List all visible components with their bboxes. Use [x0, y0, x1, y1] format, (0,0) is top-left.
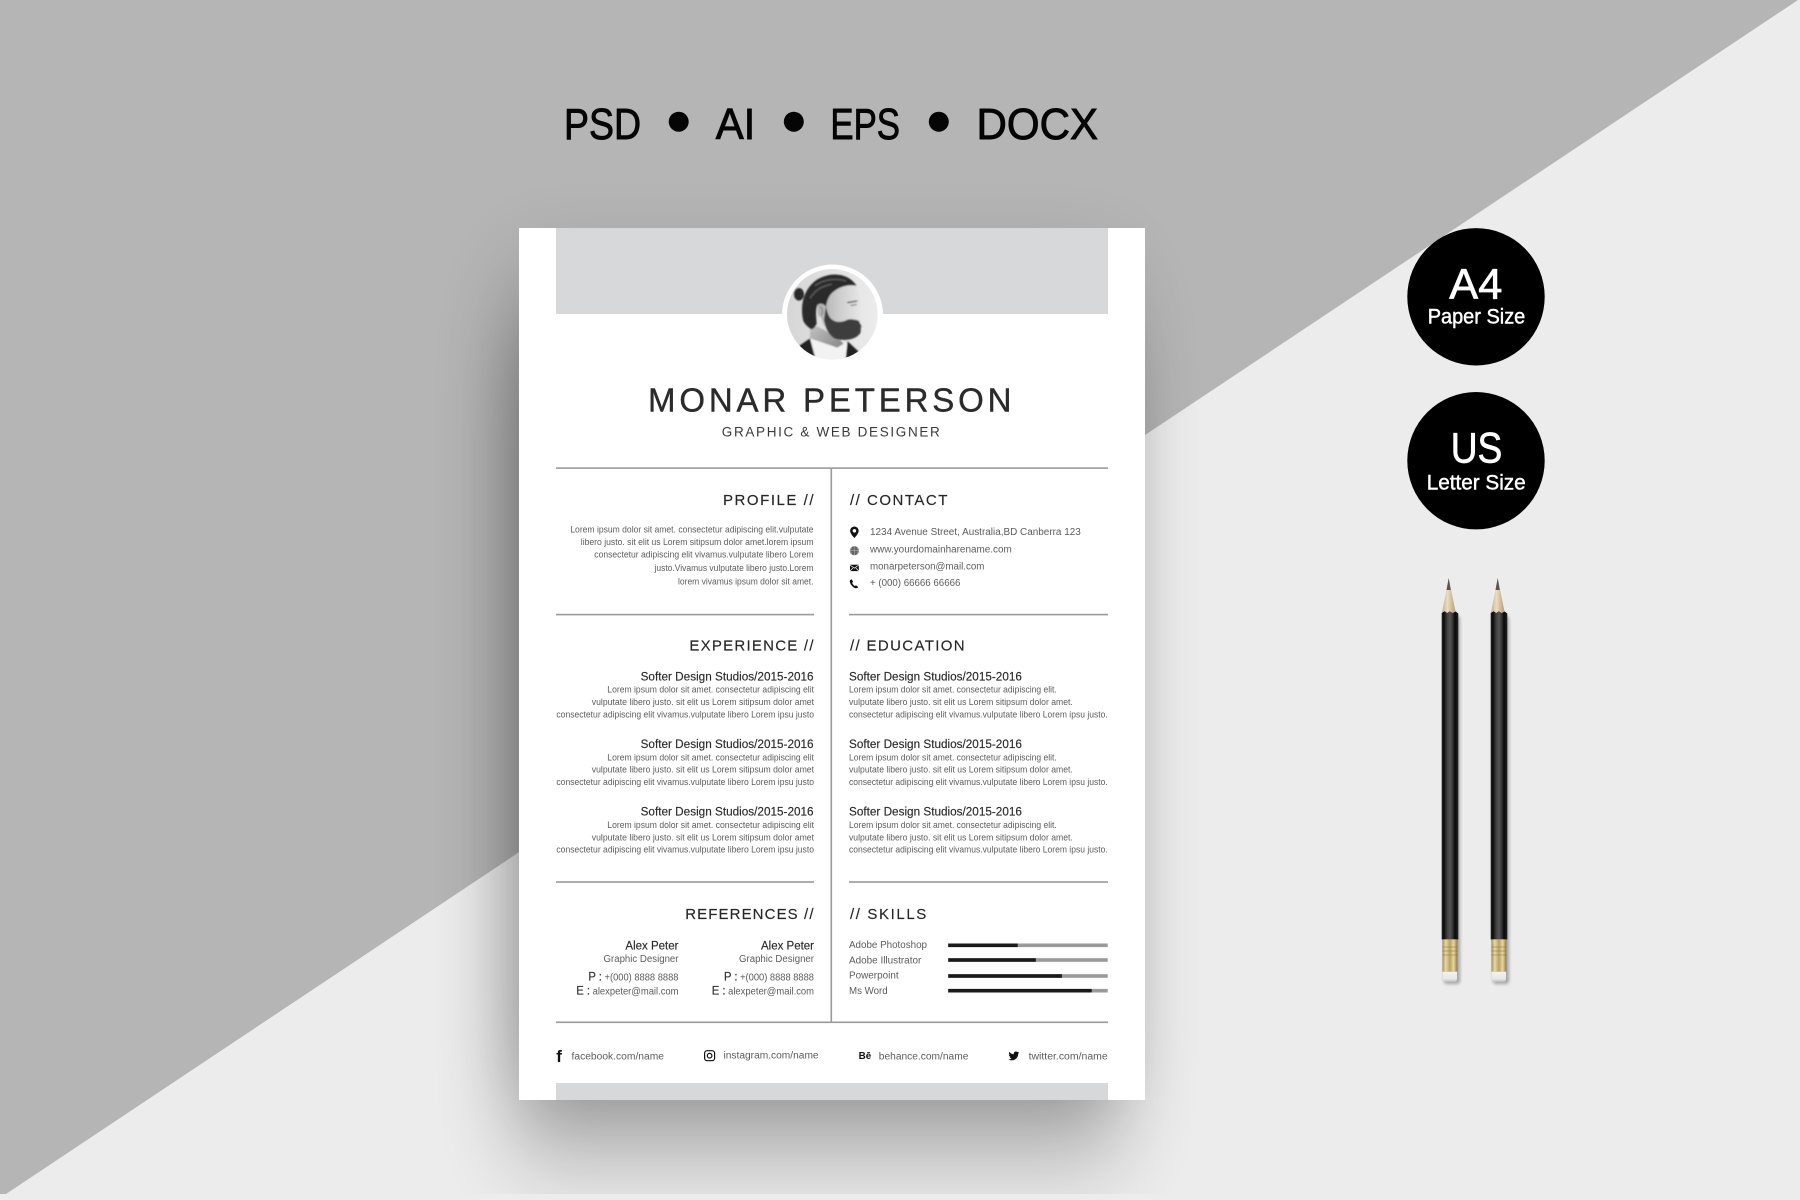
icon: globe: [850, 546, 859, 555]
education heading: // EDUCATION: [850, 638, 965, 655]
page drop shadow: [514, 310, 1120, 1126]
section divider rules: [556, 467, 1108, 1023]
icon: instagram: [705, 1051, 715, 1061]
profile heading: PROFILE //: [723, 492, 814, 509]
profile body text: libero justo. sit elit us Lorem sitipsum dolor amet.lorem ipsum: [581, 537, 814, 548]
facebook link: facebook.com/name: [572, 1051, 664, 1062]
profile body text: consectetur adipiscing elit vivamus.vulputate libero Lorem: [594, 550, 814, 561]
experience entry 1: consectetur adipiscing elit vivamus.vulputate libero Lorem ipsu justo: [556, 709, 814, 720]
experience entry 3: Lorem ipsum dolor sit amet. consectetur adipiscing elit: [607, 820, 814, 831]
experience entry 2: consectetur adipiscing elit vivamus.vulputate libero Lorem ipsu justo: [556, 777, 814, 788]
education entry 3: [849, 807, 1108, 856]
icon: location pin: [850, 526, 859, 538]
icon: pencil 1: [1442, 578, 1460, 984]
references heading: REFERENCES //: [685, 906, 814, 923]
panel: profile: [570, 492, 814, 587]
format headline: PSD: [564, 100, 641, 149]
experience entry 2: vulputate libero justo. sit elit us Lorem sitipsum dolor amet: [592, 765, 814, 776]
badge: US letter size: Letter Size: [1427, 471, 1526, 494]
instagram link: instagram.com/name: [724, 1050, 819, 1061]
panel: resume page: [519, 228, 1145, 1100]
experience entry 3: [556, 807, 814, 856]
education entry 2: Lorem ipsum dolor sit amet. consectetur adipiscing elit.: [849, 752, 1057, 763]
skills heading: // SKILLS: [850, 906, 926, 923]
badge: A4 paper size: A4: [1449, 260, 1502, 308]
reference 1: P : +(000) 8888 8888: [588, 970, 679, 984]
icon: twitter: [1008, 1051, 1019, 1060]
bottom grey band: [556, 1083, 1108, 1100]
contact phone: + (000) 66666 66666: [870, 578, 961, 589]
experience entry 2: [556, 739, 814, 788]
skill: Adobe Photoshop: Adobe Photoshop: [849, 940, 927, 951]
skill: Adobe Photoshop: [849, 940, 1108, 951]
profile body text: lorem vivamus ipsum dolor sit amet.: [678, 576, 814, 587]
contact address: 1234 Avenue Street, Australia,BD Canberra 123: [870, 527, 1081, 538]
experience entry 2: Softer Design Studios/2015-2016: [641, 739, 814, 751]
education entry 3: consectetur adipiscing elit vivamus.vulputate libero Lorem ipsu justo.: [849, 845, 1108, 856]
education entry 3: vulputate libero justo. sit elit us Lorem sitipsum dolor amet.: [849, 832, 1073, 843]
format headline: [564, 100, 1098, 149]
skill: Adobe Illustrator: [849, 955, 1108, 966]
icon: envelope: [850, 565, 859, 571]
format headline: EPS: [830, 100, 900, 149]
reference 1: Alex Peter: [625, 940, 679, 952]
education entry 1: consectetur adipiscing elit vivamus.vulputate libero Lorem ipsu justo.: [849, 709, 1108, 720]
format headline: AI: [716, 100, 755, 149]
badge: A4 paper size: Paper Size: [1428, 305, 1525, 328]
panel: skills: [849, 906, 1108, 997]
badge: A4 paper size: [1407, 228, 1545, 366]
avatar: portrait photo in circle: [782, 264, 883, 360]
education entry 2: vulputate libero justo. sit elit us Lorem sitipsum dolor amet.: [849, 765, 1073, 776]
twitter link: twitter.com/name: [1029, 1051, 1108, 1062]
panel: contact: [850, 492, 1081, 589]
experience entry 2: Lorem ipsum dolor sit amet. consectetur adipiscing elit: [607, 752, 814, 763]
profile body text: [570, 525, 814, 587]
education entry 2: consectetur adipiscing elit vivamus.vulputate libero Lorem ipsu justo.: [849, 777, 1108, 788]
experience entry 3: consectetur adipiscing elit vivamus.vulputate libero Lorem ipsu justo: [556, 845, 814, 856]
reference 2: [712, 940, 815, 997]
icon: behance: Bē: [859, 1050, 871, 1062]
skill: Ms Word: Ms Word: [849, 986, 888, 997]
experience entry 1: Lorem ipsum dolor sit amet. consectetur adipiscing elit: [607, 685, 814, 696]
reference 2: E : alexpeter@mail.com: [712, 983, 814, 997]
badge: US letter size: US: [1451, 424, 1502, 472]
bottom edge strip: [0, 1194, 1800, 1200]
education entry 1: vulputate libero justo. sit elit us Lorem sitipsum dolor amet.: [849, 697, 1073, 708]
education entry 2: Softer Design Studios/2015-2016: [849, 739, 1022, 751]
education entry 1: [849, 671, 1108, 720]
badge: US letter size: [1407, 392, 1545, 529]
skill: Ms Word: [849, 986, 1108, 997]
reference 2: P : +(000) 8888 8888: [724, 970, 814, 984]
skill: Powerpoint: Powerpoint: [849, 971, 899, 982]
experience entry 3: vulputate libero justo. sit elit us Lorem sitipsum dolor amet: [592, 832, 814, 843]
contact website: www.yourdomainharename.com: [869, 545, 1012, 556]
experience entry 1: Softer Design Studios/2015-2016: [641, 671, 814, 683]
education entry 3: Softer Design Studios/2015-2016: [849, 807, 1022, 819]
education entry 1: Softer Design Studios/2015-2016: [849, 671, 1022, 683]
education entry 2: [849, 739, 1108, 788]
name heading: MONAR PETERSON: [648, 382, 1012, 419]
experience entry 1: vulputate libero justo. sit elit us Lorem sitipsum dolor amet: [592, 697, 814, 708]
behance link: behance.com/name: [879, 1051, 969, 1062]
panel: education: [849, 638, 1108, 856]
icon: phone: [850, 579, 858, 588]
top grey header band: [556, 228, 1108, 314]
skill: Adobe Illustrator: Adobe Illustrator: [849, 955, 922, 966]
education entry 1: Lorem ipsum dolor sit amet. consectetur adipiscing elit.: [849, 685, 1057, 696]
icon: pencil 2: [1491, 578, 1509, 984]
education entry 3: Lorem ipsum dolor sit amet. consectetur adipiscing elit.: [849, 820, 1057, 831]
experience entry 3: Softer Design Studios/2015-2016: [641, 807, 814, 819]
reference 1: [576, 940, 679, 997]
page sheet: [519, 228, 1145, 1100]
experience heading: EXPERIENCE //: [689, 638, 814, 655]
reference 1: E : alexpeter@mail.com: [576, 983, 678, 997]
panel: references: [576, 906, 815, 997]
icon: facebook: f: [556, 1047, 562, 1066]
contact email: monarpeterson@mail.com: [870, 561, 984, 572]
profile body text: Lorem ipsum dolor sit amet. consectetur adipiscing elit.vulputate: [570, 525, 814, 536]
profile body text: justo.Vivamus vulputate libero justo.Lorem: [654, 563, 814, 574]
reference 2: Alex Peter: [761, 940, 814, 952]
reference 2: Graphic Designer: [739, 954, 815, 965]
experience entry 1: [556, 671, 814, 720]
format headline: DOCX: [976, 100, 1098, 149]
panel: social links footer: [556, 1047, 1108, 1066]
skill: Powerpoint: [849, 971, 1108, 982]
reference 1: Graphic Designer: [604, 954, 679, 965]
panel: experience: [556, 638, 814, 856]
contact heading: // CONTACT: [850, 492, 947, 509]
job title: GRAPHIC & WEB DESIGNER: [722, 424, 940, 439]
